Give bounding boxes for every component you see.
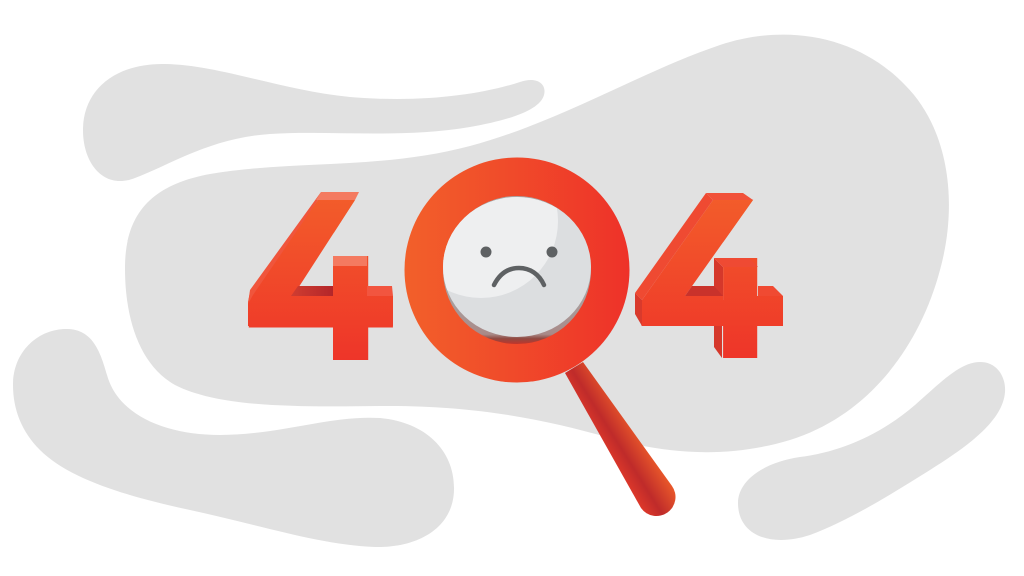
right eye (546, 246, 558, 258)
right digit 4: 4 (638, 150, 783, 408)
handle (565, 362, 676, 516)
lens (443, 197, 591, 337)
magnifying glass (404, 144, 676, 516)
left eye (480, 246, 492, 258)
lens rim (443, 196, 591, 344)
left digit 4: 4 (245, 151, 394, 410)
lens highlight (443, 197, 558, 298)
blob: bottom right (738, 362, 1005, 540)
sad face (480, 246, 558, 285)
blob: main background shape (125, 35, 949, 452)
mouth (494, 268, 544, 285)
blob: top left (83, 64, 545, 181)
ring (404, 158, 630, 382)
blob: bottom left (13, 329, 454, 547)
